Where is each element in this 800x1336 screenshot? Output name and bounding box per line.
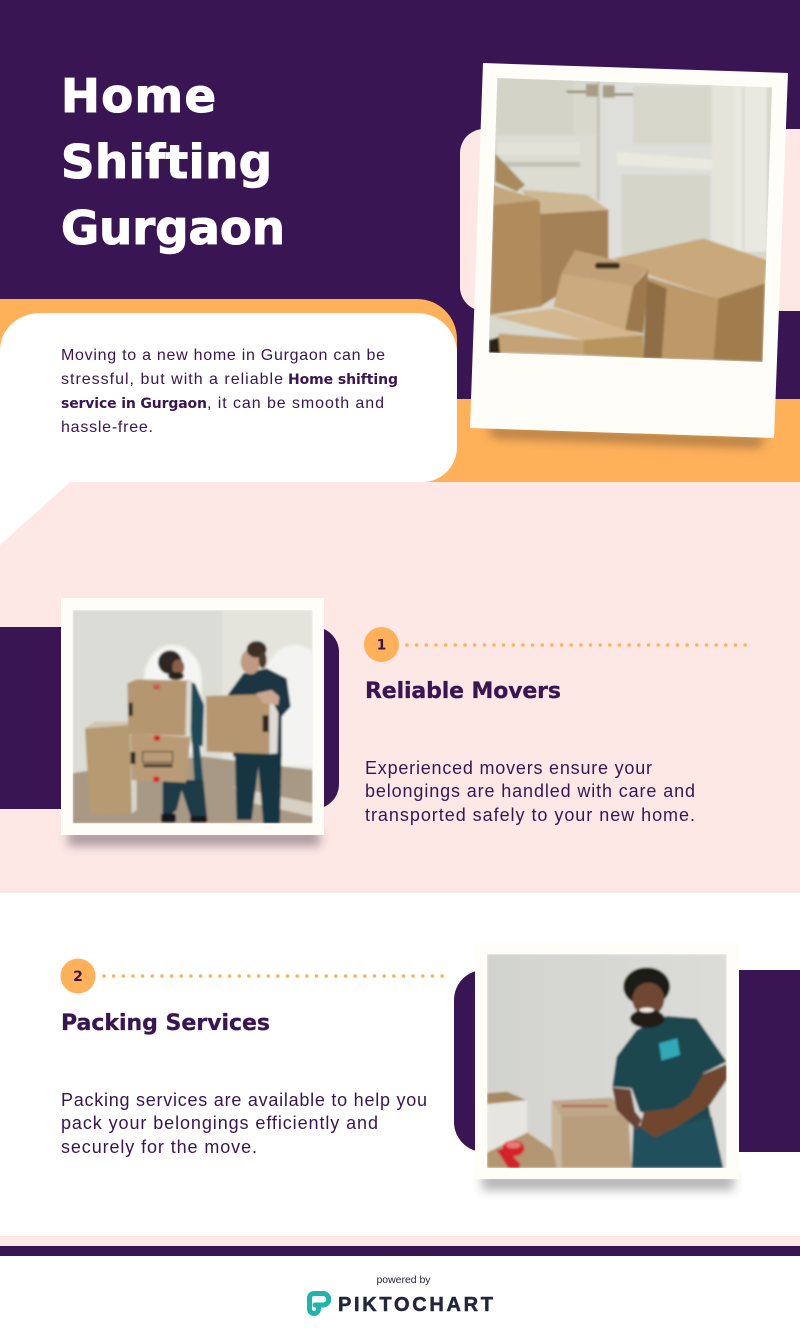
intro text: Home shifting xyxy=(288,372,398,388)
icon: Piktochart logo xyxy=(310,1294,329,1314)
photo frame xyxy=(61,598,324,835)
title: Gurgaon xyxy=(61,201,285,255)
background: pink decorative block xyxy=(460,129,800,311)
intro text xyxy=(61,347,398,436)
description: securely for the move. xyxy=(61,1137,257,1157)
number badge 2: 2 xyxy=(73,969,83,985)
polaroid frame xyxy=(470,63,788,438)
description xyxy=(365,758,695,825)
description: Packing services are available to help you xyxy=(61,1090,427,1110)
title: Home xyxy=(61,69,216,123)
number badge 2 xyxy=(60,958,96,994)
intro text: hassle-free. xyxy=(61,419,153,436)
background: orange strip xyxy=(420,399,800,483)
description: Experienced movers ensure your xyxy=(365,758,652,778)
photo xyxy=(487,954,727,1168)
intro text: Moving to a new home in Gurgaon can be xyxy=(61,347,385,364)
photo of cardboard boxes xyxy=(487,77,773,363)
photo frame xyxy=(475,943,739,1179)
photo shadow xyxy=(482,1174,734,1190)
section 1: purple backing shape xyxy=(0,627,339,809)
section 2: purple backing shape xyxy=(454,970,800,1152)
section 1 photo: two movers with boxes xyxy=(61,598,325,846)
polaroid shadow xyxy=(486,426,766,448)
background: pink section xyxy=(0,482,800,893)
photo shadow xyxy=(68,830,320,846)
logo wordmark: PIKTOCHART xyxy=(338,1294,493,1316)
description xyxy=(61,1090,427,1157)
intro text: , it can be smooth and xyxy=(207,395,384,412)
number badge 1 xyxy=(364,627,399,662)
polaroid photo: boxes by door xyxy=(470,63,788,448)
intro text: stressful, but with a reliable xyxy=(61,371,283,388)
background: white corner xyxy=(0,482,70,545)
background: header purple xyxy=(0,0,800,400)
description: belongings are handled with care and xyxy=(365,781,695,801)
footer bands xyxy=(0,1236,800,1256)
heading: Reliable Movers: Reliable Movers xyxy=(365,679,561,704)
dotted connector xyxy=(104,974,443,978)
dotted connector xyxy=(407,643,746,647)
section 2 text xyxy=(60,958,443,1157)
title xyxy=(61,69,285,255)
section 1 text xyxy=(364,627,746,825)
footer: powered by Piktochart xyxy=(310,1274,493,1316)
photo xyxy=(73,610,325,823)
intro card xyxy=(0,299,457,482)
number badge 1: 1 xyxy=(377,638,386,654)
intro text: service in Gurgaon xyxy=(61,396,207,412)
background: white section xyxy=(0,893,800,1236)
description: transported safely to your new home. xyxy=(365,805,695,825)
description: pack your belongings efficiently and xyxy=(61,1113,378,1133)
heading: Packing Services: Packing Services xyxy=(61,1011,270,1036)
footer: powered by Piktochart: powered by xyxy=(376,1274,431,1286)
section 2 photo: smiling mover xyxy=(475,943,739,1190)
title: Shifting xyxy=(61,135,272,189)
